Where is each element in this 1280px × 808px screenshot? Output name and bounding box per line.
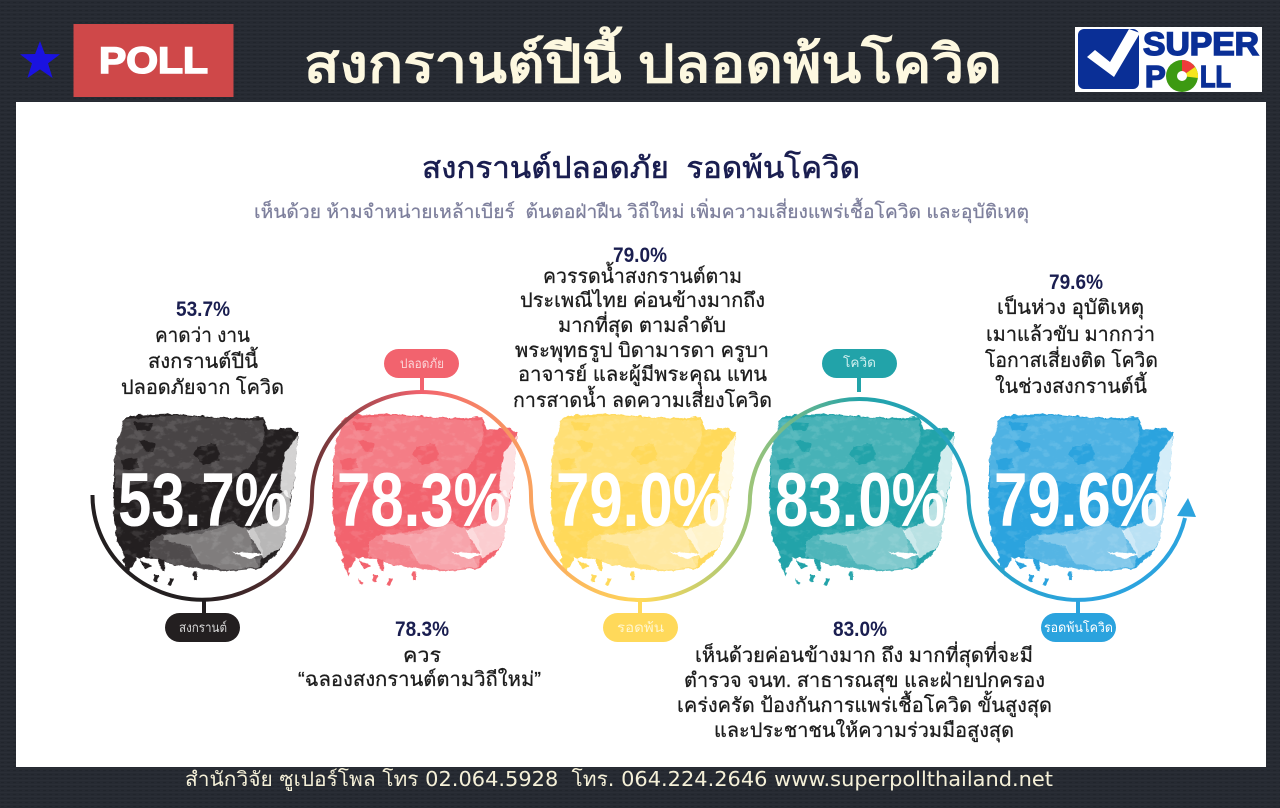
text block: 83.0% (677, 618, 1052, 743)
watercolor stat: 78.3% (332, 414, 517, 585)
badge: POLL (74, 24, 234, 97)
pill: โควิด: โควิด (843, 355, 876, 370)
watercolor stat: 79.0% (551, 414, 736, 585)
text block: 53.7%: คาดว่า งาน (155, 325, 250, 347)
badge: POLL: POLL (99, 40, 208, 81)
title: สงกรานต์ปีนี้ ปลอดพ้นโควิด (304, 26, 1002, 94)
heading: สงกรานต์ปลอดภัย รอดพ้นโควิด (422, 150, 860, 185)
icon: star (20, 41, 60, 78)
logo: Super Poll: SUPER (1143, 26, 1259, 62)
text block: 79.0%: มากที่สุด ตามลำดับ (558, 311, 726, 338)
text block: 79.6%: 79.6% (1049, 271, 1103, 294)
pill: ปลอดภัย (384, 349, 459, 392)
text block: 79.0%: พระพุทธรูป บิดามารดา ครูบา (515, 340, 769, 363)
text block: 83.0%: ตำรวจ จนท. สาธารณสุข และฝ่ายปกครอง (684, 670, 1045, 693)
text block: 83.0%: เห็นด้วยค่อนข้างมาก ถึง มากที่สุดที่จะมี (695, 641, 1033, 668)
watercolor stat: 78.3%: 78.3% (337, 458, 507, 543)
text block: 78.3% (298, 618, 541, 691)
text block: 78.3%: ควร (403, 645, 441, 667)
footer contact line: สำนักวิจัย ซูเปอร์โพล โทร 02.064.5928 โทร. 064.224.2646 www.superpollthailand.net (185, 767, 1053, 792)
text block: 83.0%: 83.0% (833, 618, 887, 641)
text block: 53.7% (121, 298, 284, 399)
text block: 79.6%: โอกาสเสี่ยงติด โควิด (985, 346, 1158, 372)
watercolor stat: 83.0%: 83.0% (775, 458, 945, 543)
watercolor stat: 79.6% (988, 414, 1173, 585)
text block: 79.0%: ควรรดน้ำสงกรานต์ตาม (543, 262, 742, 288)
text block: 53.7%: ปลอดภัยจาก โควิด (121, 376, 284, 399)
subheading: เห็นด้วย ห้ามจำหน่ายเหล้าเบียร์ ต้นตอฝ่าฝืน วิถีใหม่ เพิ่มความเสี่ยงแพร่เชื้อโควิด และอุบัติเหตุ (254, 198, 1029, 224)
logo: Super Poll: LL (1200, 59, 1231, 94)
pill: รอดพ้นโควิด: รอดพ้นโควิด (1044, 620, 1113, 635)
text block: 79.0%: การสาดน้ำ ลดความเสี่ยงโควิด (513, 386, 772, 412)
watercolor stat: 79.6%: 79.6% (994, 458, 1164, 543)
text block: 79.0% (513, 244, 772, 412)
arrow: wavy flow line through all stats (92, 392, 1196, 600)
text block: 83.0%: เคร่งครัด ป้องกันการแพร่เชื้อโควิด ขั้นสูงสุด (677, 691, 1052, 718)
pill: รอดพ้นโควิด (1041, 600, 1116, 642)
logo: Super Poll (1075, 26, 1262, 94)
text block: 53.7%: 53.7% (176, 298, 230, 321)
pill: รอดพ้น (603, 600, 678, 642)
text block: 79.6%: ในช่วงสงกรานต์นี้ (995, 372, 1147, 398)
text block: 79.0%: 79.0% (613, 244, 667, 267)
watercolor stat: 53.7%: 53.7% (118, 458, 288, 543)
pill: สงกรานต์ (165, 600, 240, 642)
text block: 78.3%: 78.3% (395, 618, 449, 641)
logo: Super Poll: P (1145, 59, 1166, 94)
watercolor stat: 83.0% (769, 414, 954, 585)
pill: สงกรานต์: สงกรานต์ (179, 620, 227, 635)
text block: 79.0%: ประเพณีไทย ค่อนข้างมากถึง (520, 289, 765, 312)
text block: 79.6% (985, 271, 1158, 398)
text block: 79.6%: เมาแล้วขับ มากกว่า (986, 324, 1155, 346)
watercolor stat: 79.0%: 79.0% (556, 458, 726, 543)
text block: 83.0%: และประชาชนให้ความร่วมมือสูงสุด (714, 719, 1014, 743)
header: star and poll badge (20, 24, 234, 97)
pill: รอดพ้น: รอดพ้น (617, 620, 664, 635)
watercolor stat: 53.7% (113, 414, 298, 585)
pill: ปลอดภัย: ปลอดภัย (400, 356, 444, 371)
pill: โควิด (822, 349, 897, 392)
text block: 79.6%: เป็นห่วง อุบัติเหตุ (997, 294, 1144, 320)
text block: 78.3%: “ฉลองสงกรานต์ตามวิถีใหม่” (298, 668, 541, 691)
text block: 79.0%: อาจารย์ และผู้มีพระคุณ แทน (518, 363, 767, 387)
text block: 53.7%: สงกรานต์ปีนี้ (148, 347, 258, 373)
